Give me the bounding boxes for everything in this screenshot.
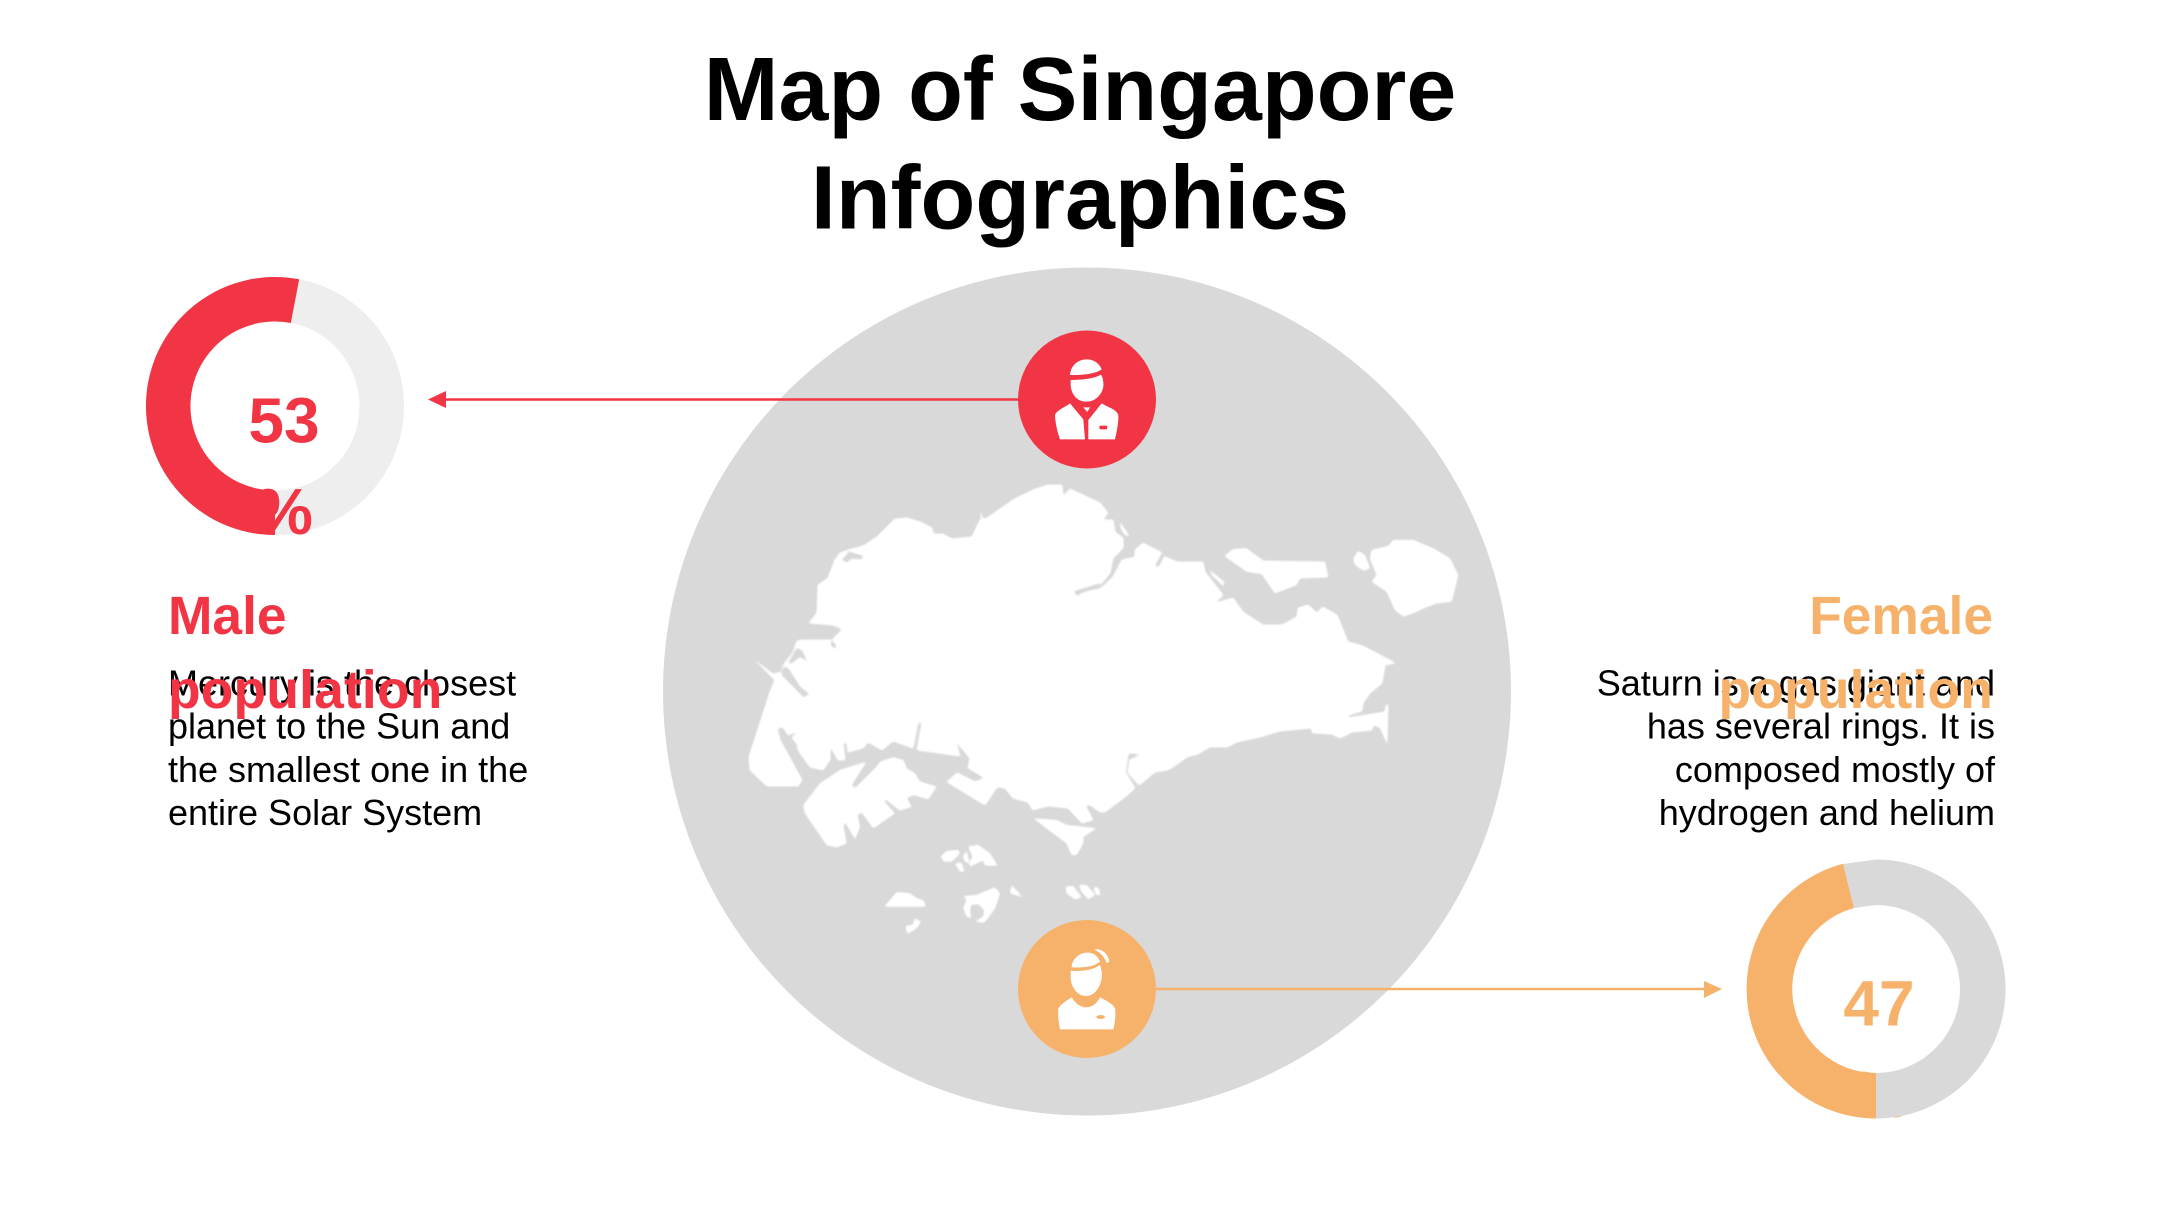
heading: male population xyxy=(168,587,442,720)
main island xyxy=(749,485,1395,823)
heading: female population xyxy=(1718,587,1993,720)
map: grey circle with Singapore silhouette xyxy=(663,268,1511,1116)
text block: male description xyxy=(168,662,528,833)
icon: male person xyxy=(1018,330,1156,468)
north-east islands xyxy=(1224,540,1458,617)
value: 53%: 53 xyxy=(248,384,320,456)
value: 47% percent sign behind ring: % xyxy=(1851,1058,1909,1131)
text block: female description: has several rings. It is xyxy=(1647,706,1995,747)
heading: female population: Female xyxy=(1809,587,1993,646)
icon: female person xyxy=(1018,920,1156,1058)
donut: female 47% xyxy=(1747,860,2006,1131)
arrow: female icon to donut xyxy=(1154,981,1722,998)
main island grey inlets xyxy=(782,552,1100,697)
heading: female population: population xyxy=(1718,661,1993,720)
text block: male description: Mercury is the closest xyxy=(168,662,516,704)
text block: male description: entire Solar System xyxy=(168,792,482,833)
text block: female description xyxy=(1597,662,1996,833)
value: 47: 47 xyxy=(1843,968,1915,1040)
title xyxy=(704,40,1456,248)
text block: female description: Saturn is a gas giant and xyxy=(1597,662,1995,704)
title: Infographics xyxy=(811,148,1349,248)
text block: male description: the smallest one in the xyxy=(168,749,528,790)
small white slivers xyxy=(1120,522,1224,587)
text block: female description: composed mostly of xyxy=(1675,749,1996,790)
text block: male description: planet to the Sun and xyxy=(168,706,510,747)
text block: female description: hydrogen and helium xyxy=(1659,792,1995,833)
title: Map of Singapore xyxy=(704,40,1456,140)
heading: male population: Male xyxy=(168,587,287,646)
value: 53% xyxy=(248,384,320,548)
value: 53%: % xyxy=(255,475,313,548)
southern islands xyxy=(803,757,1097,934)
arrow: male icon to donut xyxy=(428,391,1020,408)
donut: male 53% xyxy=(146,277,382,548)
heading: male population: population xyxy=(168,661,442,720)
